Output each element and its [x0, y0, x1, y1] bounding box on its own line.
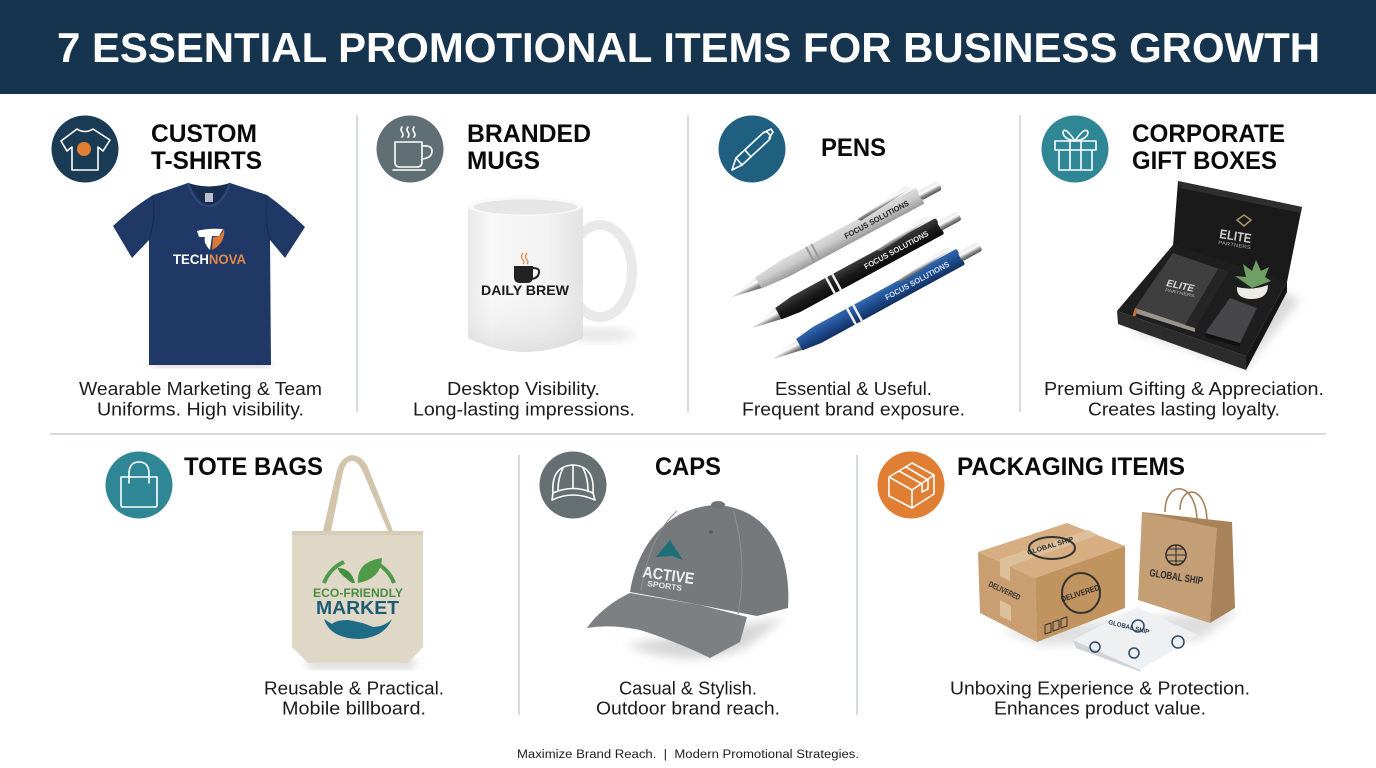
description: caps: Outdoor brand reach. — [596, 698, 780, 718]
description: packaging items — [950, 678, 1250, 718]
image: black gift box with notebook, plant and power bank: PARTNERS — [1165, 287, 1196, 298]
description: custom t-shirts: Wearable Marketing & Team — [79, 379, 322, 399]
image: kraft shipping box, paper bag and tissue wrap: GLOBAL SHIP — [1027, 536, 1075, 557]
image: black gift box with notebook, plant and power bank: ELITE — [1219, 226, 1253, 246]
heading: pens: PENS — [821, 134, 886, 162]
icon: gift — [1042, 116, 1108, 182]
image: black gift box with notebook, plant and power bank: ELITE — [1165, 278, 1195, 295]
image: grey baseball cap: SPORTS — [647, 579, 683, 593]
image: navy t-shirt — [113, 183, 305, 367]
heading: tote bags: TOTE BAGS — [184, 453, 323, 481]
icon: mug — [376, 116, 444, 182]
description: caps — [596, 678, 780, 718]
image: black gift box with notebook, plant and power bank — [1117, 181, 1302, 370]
image: white mug — [468, 196, 634, 352]
heading: custom t-shirts: CUSTOM — [151, 120, 257, 148]
image: kraft shipping box, paper bag and tissue wrap — [978, 489, 1240, 672]
image: grey baseball cap — [587, 501, 788, 658]
panel: branded mugs — [376, 116, 635, 420]
image: silver pen: FOCUS SOLUTIONS — [843, 199, 910, 241]
description: caps: Casual & Stylish. — [619, 678, 757, 698]
panel: packaging items — [878, 452, 1250, 718]
image: kraft shipping box, paper bag and tissue wrap: GLOBAL SHIP — [1108, 619, 1151, 636]
icon: tote bag — [106, 452, 172, 518]
heading: custom t-shirts: T-SHIRTS — [151, 147, 262, 175]
footer tagline: Maximize Brand Reach. | Modern Promotional Strategies. — [517, 749, 859, 761]
heading: branded mugs: MUGS — [467, 147, 540, 175]
description: pens — [742, 379, 965, 420]
image: silver pen — [725, 172, 944, 305]
panel: tote bags — [106, 452, 444, 718]
icon: package — [878, 452, 944, 518]
description: corporate gift boxes: Creates lasting loyalty. — [1088, 400, 1280, 420]
image: black pen: FOCUS SOLUTIONS — [863, 229, 930, 271]
heading: corporate gift boxes — [1132, 120, 1285, 175]
description: packaging items: Unboxing Experience & Protection. — [950, 678, 1250, 698]
image: blue pen — [766, 233, 985, 367]
heading: packaging items: PACKAGING ITEMS — [957, 453, 1185, 481]
heading: branded mugs: BRANDED — [467, 120, 591, 148]
image: kraft shipping box, paper bag and tissue wrap: DELIVERED — [987, 580, 1022, 602]
title banner — [0, 0, 1376, 94]
image: black gift box with notebook, plant and power bank: PARTNERS — [1218, 240, 1252, 251]
description: tote bags — [264, 678, 444, 718]
heading: caps: CAPS — [655, 453, 721, 481]
image: navy t-shirt: TECHNOVA — [173, 252, 246, 267]
image: canvas tote bag — [292, 455, 423, 668]
image: white mug: DAILY BREW — [481, 282, 570, 298]
image: canvas tote bag: MARKET — [316, 598, 399, 618]
icon: pen — [718, 116, 786, 182]
panel: pens — [718, 116, 985, 420]
description: branded mugs — [413, 379, 635, 420]
description: branded mugs: Long-lasting impressions. — [413, 400, 635, 420]
panel: custom t-shirts — [52, 116, 322, 420]
description: pens: Frequent brand exposure. — [742, 400, 965, 420]
heading: branded mugs — [467, 120, 591, 175]
description: corporate gift boxes: Premium Gifting & Appreciation. — [1044, 379, 1324, 399]
description: pens: Essential & Useful. — [775, 379, 932, 399]
description: corporate gift boxes — [1044, 379, 1324, 420]
image: canvas tote bag: ECO-FRIENDLY — [313, 588, 403, 600]
icon: t-shirt — [52, 116, 118, 182]
panel: corporate gift boxes — [1042, 116, 1324, 420]
panel: caps — [540, 452, 788, 718]
heading: corporate gift boxes: CORPORATE — [1132, 120, 1285, 148]
image: kraft shipping box, paper bag and tissue wrap: GLOBAL SHIP — [1149, 567, 1204, 587]
heading: custom t-shirts — [151, 120, 262, 175]
description: branded mugs: Desktop Visibility. — [447, 379, 600, 399]
title banner: 7 ESSENTIAL PROMOTIONAL ITEMS FOR BUSINESS GROWTH — [57, 24, 1320, 71]
description: tote bags: Reusable & Practical. — [264, 678, 444, 698]
icon: cap — [540, 452, 606, 518]
description: custom t-shirts — [79, 379, 322, 420]
image: kraft shipping box, paper bag and tissue wrap: DELIVERED — [1060, 583, 1101, 604]
description: custom t-shirts: Uniforms. High visibility. — [97, 400, 304, 420]
description: tote bags: Mobile billboard. — [282, 698, 426, 718]
description: packaging items: Enhances product value. — [994, 698, 1206, 718]
image: black pen — [745, 202, 964, 336]
heading: corporate gift boxes: GIFT BOXES — [1132, 147, 1277, 175]
image: blue pen: FOCUS SOLUTIONS — [883, 260, 951, 302]
image: grey baseball cap: ACTIVE — [641, 564, 696, 588]
